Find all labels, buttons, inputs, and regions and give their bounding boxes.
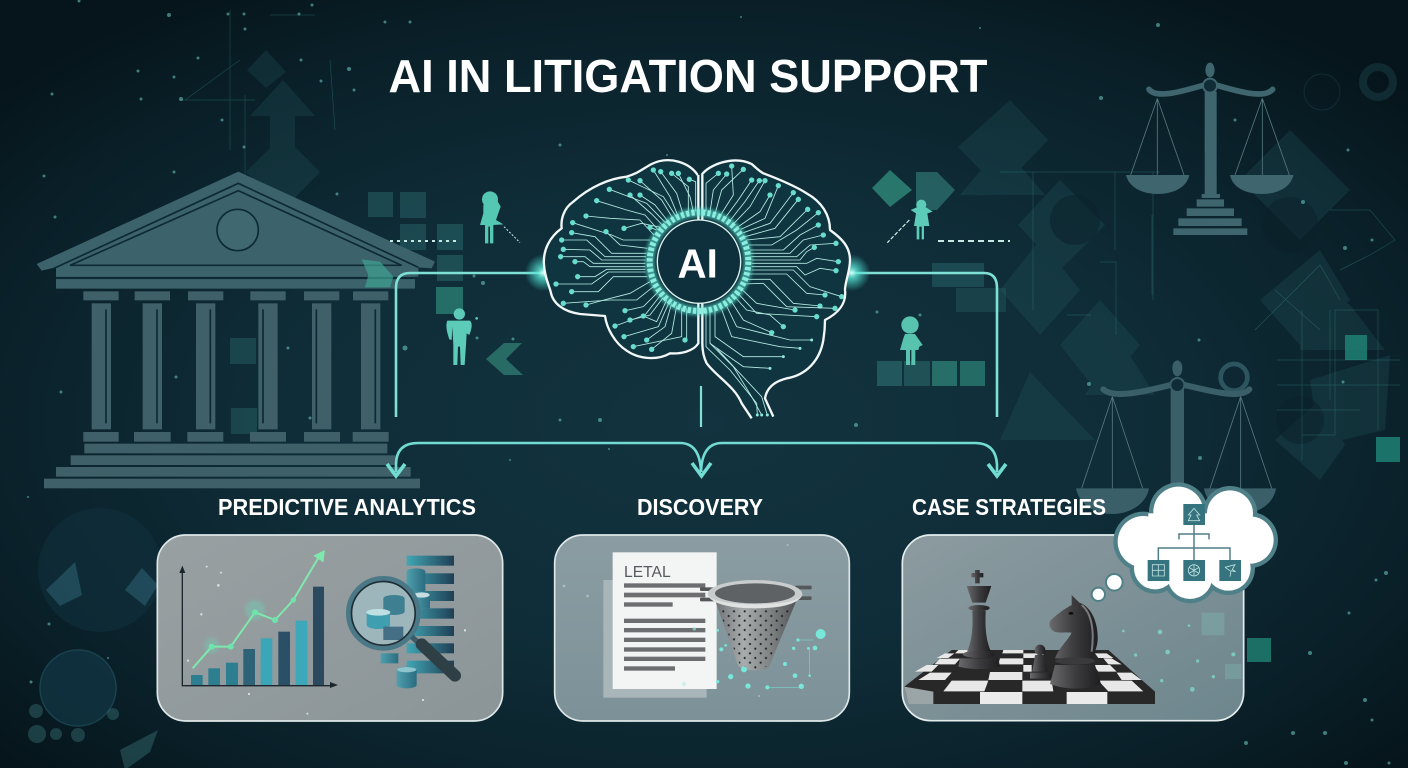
network motif — [1122, 613, 1242, 692]
heading: predictive analytics: PREDICTIVE ANALYTICS — [218, 494, 476, 520]
icon: courthouse — [37, 172, 435, 488]
panel: predictive analytics — [157, 535, 503, 721]
brain circuits — [556, 166, 842, 415]
figure: person lower left — [446, 308, 478, 365]
chess pawn — [1030, 645, 1052, 679]
icon: AI brain — [525, 159, 870, 418]
panel: discovery — [555, 535, 849, 721]
bar chart with trend line — [179, 550, 338, 688]
connector: centre stem — [700, 386, 702, 427]
chess knight — [1049, 595, 1101, 689]
chess board — [904, 650, 1155, 704]
icon: legal document: LETAL — [624, 564, 671, 581]
heading: case strategies: CASE STRATEGIES — [912, 494, 1106, 520]
icon: legal document — [603, 552, 717, 698]
connector: right brain branch — [850, 273, 997, 417]
AI core badge: AI — [677, 240, 718, 286]
title: AI IN LITIGATION SUPPORT — [388, 50, 988, 102]
figure: person top right — [887, 200, 933, 243]
icon: lower scales of justice — [1076, 360, 1276, 514]
brain outline — [544, 160, 850, 418]
figure: person lower right — [900, 316, 923, 365]
panel: case strategies — [902, 482, 1278, 721]
glowing bead ring — [650, 212, 748, 311]
filtered data points — [682, 627, 826, 689]
heading: discovery: DISCOVERY — [637, 494, 763, 520]
connector: left brain branch — [396, 273, 545, 417]
bead ring — [650, 212, 748, 311]
icon: filter strainer — [700, 580, 812, 670]
icon: upper scales of justice — [1126, 63, 1293, 235]
left side glow — [525, 254, 562, 291]
right side glow — [833, 254, 870, 291]
thought cloud with decision tree — [1092, 482, 1278, 603]
figure: person top left — [480, 191, 520, 243]
chess king — [958, 570, 1000, 669]
icon: database stack under magnifier — [348, 556, 455, 688]
decorative dashes — [390, 240, 1010, 242]
arrows to the three outcomes — [387, 443, 1006, 476]
brain fill — [544, 159, 850, 418]
AI core badge — [657, 220, 741, 303]
